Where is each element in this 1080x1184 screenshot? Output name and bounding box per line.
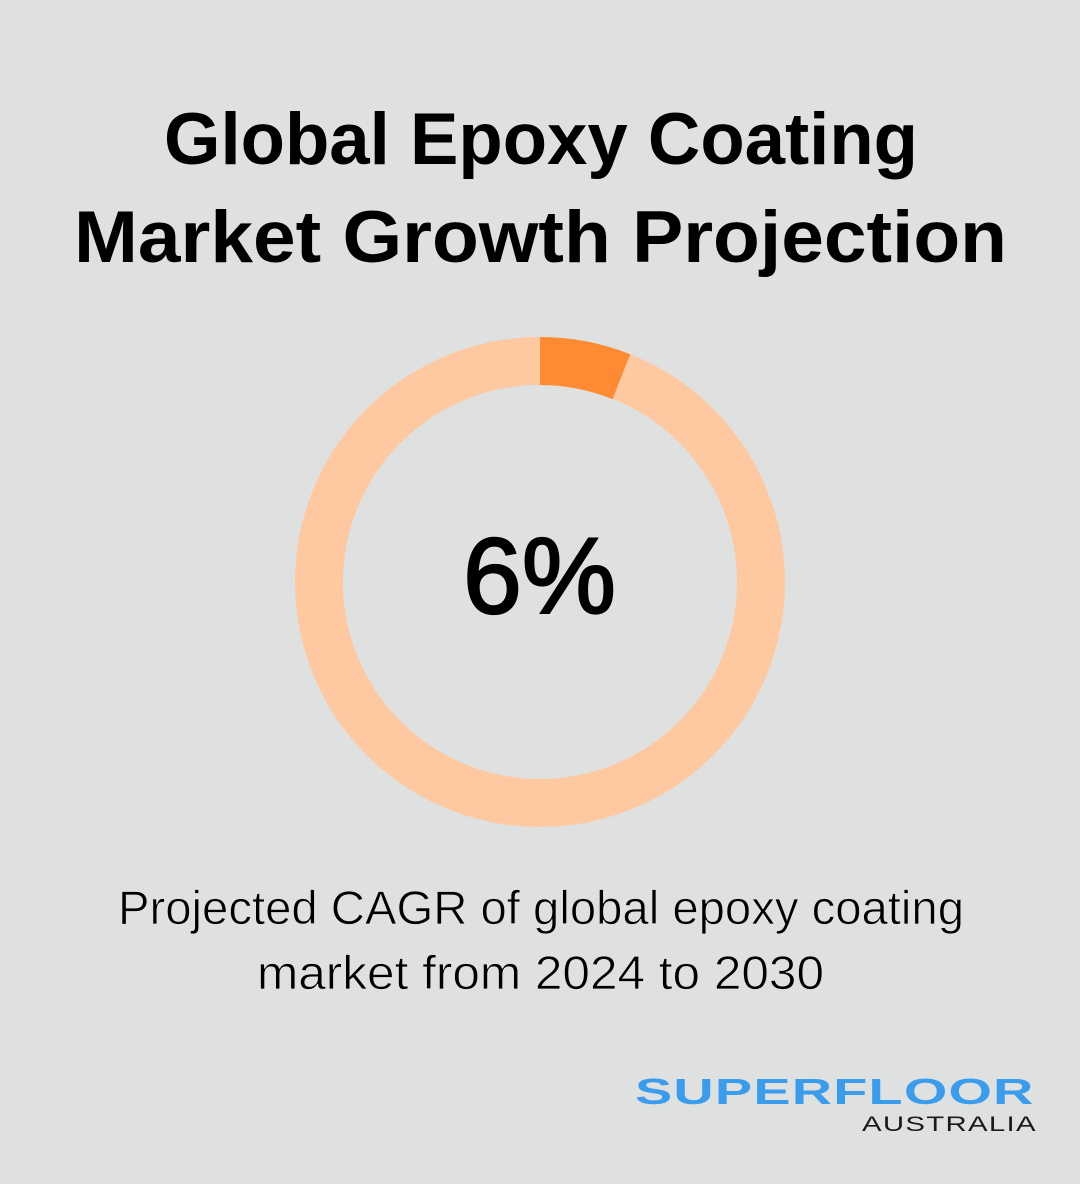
- description text: market from 2024 to 2030: [257, 946, 824, 999]
- donut highlighted segment: [540, 337, 630, 399]
- description text: [118, 881, 964, 999]
- description text: Projected CAGR of global epoxy coating: [118, 881, 964, 934]
- donut chart: 6%: [319, 337, 761, 803]
- logo: Superfloor Australia: [635, 1071, 1036, 1136]
- logo: Superfloor Australia: SUPERFLOOR: [635, 1071, 1033, 1112]
- title: [74, 99, 1007, 278]
- title: Global Epoxy Coating: [164, 99, 918, 180]
- title: Market Growth Projection: [74, 197, 1007, 278]
- logo: Superfloor Australia: AUSTRALIA: [862, 1113, 1036, 1136]
- center value: 6%: [463, 515, 616, 636]
- donut track: [319, 361, 761, 803]
